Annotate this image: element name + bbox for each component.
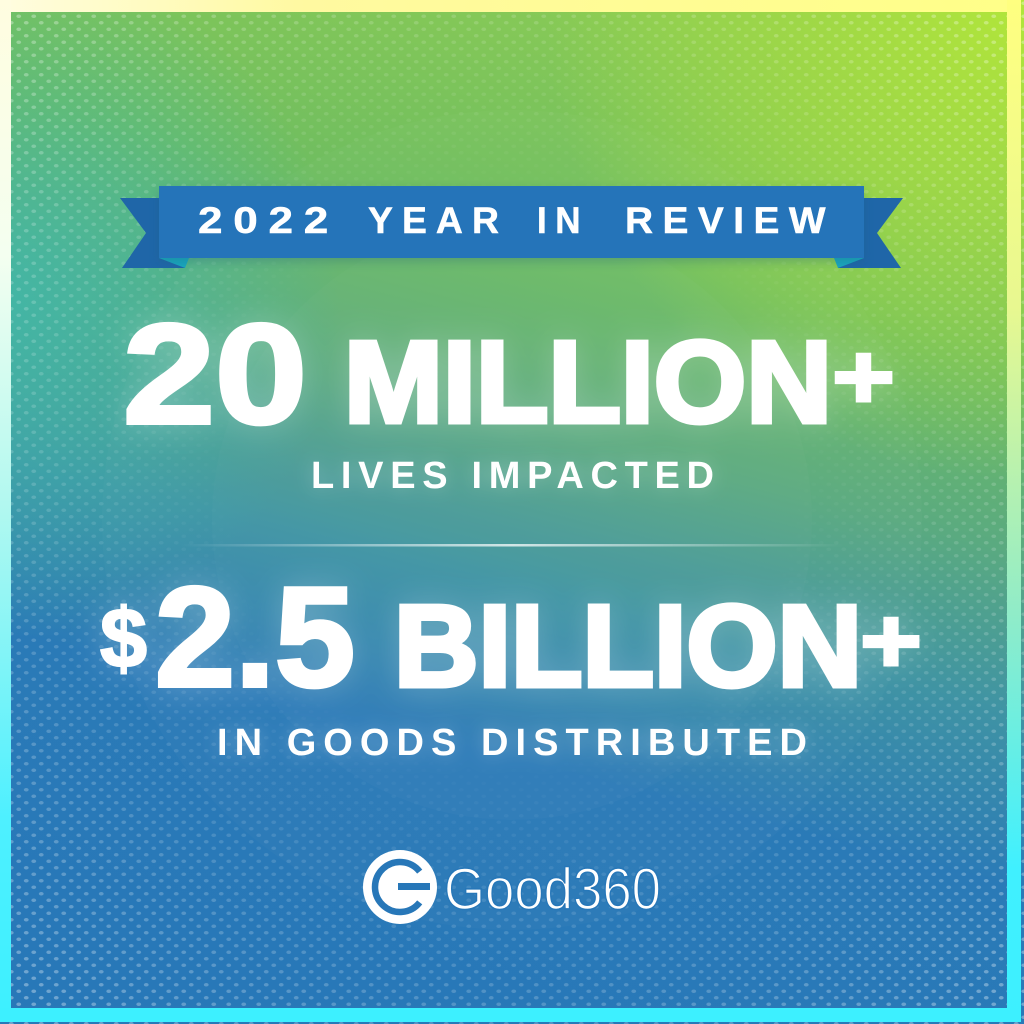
ribbon heading: REVIEW xyxy=(625,200,835,241)
statistic: lives impacted xyxy=(123,295,895,497)
caption: in goods distributed: IN GOODS DISTRIBUTED xyxy=(217,722,807,764)
ribbon right tail xyxy=(834,198,903,268)
ribbon heading xyxy=(198,200,835,241)
figure: 2.5 billion plus: + xyxy=(860,590,922,692)
figure: 2.5 billion plus: BILLION xyxy=(394,581,862,711)
ribbon heading: 2022 xyxy=(198,200,339,241)
figure: 20 million plus xyxy=(123,295,895,454)
ribbon left tail xyxy=(120,198,189,268)
figure: 20 million plus: MILLION xyxy=(344,317,832,447)
caption: lives impacted: LIVES IMPACTED xyxy=(311,455,714,497)
figure: 20 million plus: + xyxy=(832,326,895,428)
icon: G mark xyxy=(363,850,437,924)
wordmark: Good360 xyxy=(444,857,661,922)
ribbon banner xyxy=(120,186,903,268)
figure: 20 million plus: 20 xyxy=(123,295,307,454)
figure: 2.5 billion plus xyxy=(100,558,922,717)
figure: 2.5 billion plus: 2.5 xyxy=(155,558,355,717)
logo: Good360 xyxy=(363,850,661,924)
figure: 2.5 billion plus: $ xyxy=(100,591,147,685)
ribbon heading: IN xyxy=(537,200,589,241)
ribbon heading: YEAR xyxy=(368,200,508,241)
ribbon body xyxy=(159,186,864,258)
statistic: goods distributed xyxy=(100,558,922,764)
divider xyxy=(180,544,844,546)
